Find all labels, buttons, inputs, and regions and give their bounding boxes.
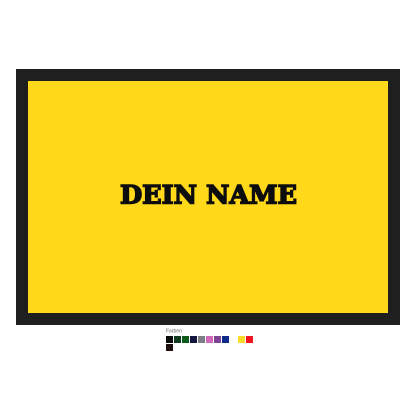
doormat panel (16, 69, 400, 325)
black border (16, 69, 400, 325)
heading: name: DEIN NAME (120, 180, 297, 210)
legend label: Farben (166, 328, 182, 334)
colour legend (166, 328, 253, 351)
colour swatches (166, 336, 253, 351)
yellow field (28, 81, 388, 313)
